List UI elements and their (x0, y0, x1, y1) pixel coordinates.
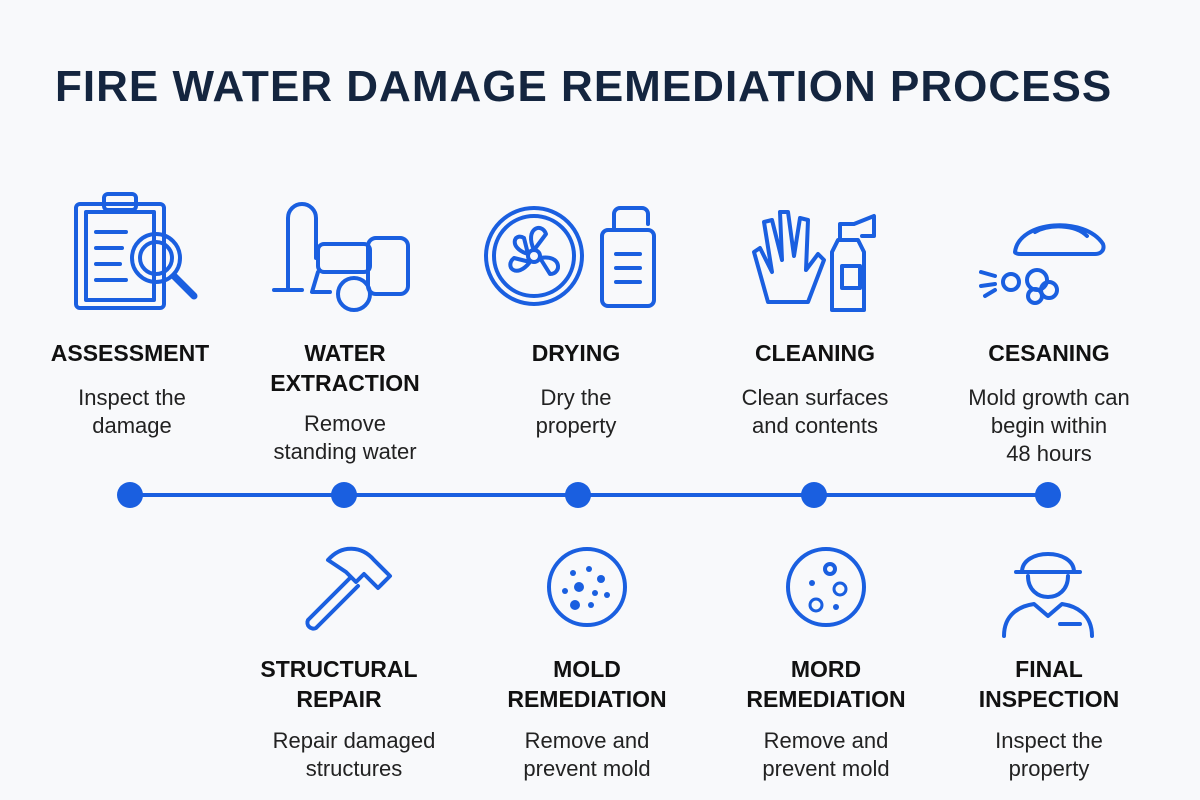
title: FIRE WATER DAMAGE REMEDIATION PROCESS (55, 62, 1112, 111)
text: drying: property (536, 413, 616, 438)
text: assessment: damage (92, 413, 172, 438)
text: assessment (78, 385, 186, 438)
heading: mord remediation: MORD (791, 656, 861, 682)
text: mold remediation (523, 728, 651, 781)
heading: drying: DRYING (532, 340, 620, 366)
text: water extraction: Remove (304, 411, 386, 436)
text: mord remediation: Remove and (764, 728, 888, 753)
text: water extraction: standing water (273, 439, 417, 464)
icon: hammer (305, 546, 392, 631)
text: cleaning (742, 385, 888, 438)
heading: final inspection: INSPECTION (979, 686, 1119, 712)
text: water extraction (273, 411, 417, 464)
icon: vacuum (272, 202, 410, 312)
text: cleaning: Clean surfaces (742, 385, 888, 410)
heading: water extraction: WATER (304, 340, 386, 366)
text: cesaning (968, 385, 1130, 466)
icon: inspector (1002, 552, 1094, 638)
icon: sponge with spray (978, 223, 1106, 305)
text: assessment: Inspect the (78, 385, 186, 410)
heading: structural repair: REPAIR (296, 686, 382, 712)
heading: assessment: ASSESSMENT (51, 340, 209, 366)
text: cesaning: begin within (991, 413, 1107, 438)
heading: mord remediation: REMEDIATION (746, 686, 906, 712)
text: drying: Dry the (541, 385, 611, 410)
text: mold remediation: prevent mold (523, 756, 651, 781)
text: cesaning: 48 hours (1006, 441, 1092, 466)
heading: water extraction: EXTRACTION (270, 370, 420, 396)
heading: structural repair (260, 656, 418, 712)
heading: mord remediation (746, 656, 906, 712)
heading: mold remediation: REMEDIATION (507, 686, 667, 712)
heading: final inspection (979, 656, 1119, 712)
heading: cleaning: CLEANING (755, 340, 875, 366)
heading: water extraction (270, 340, 420, 396)
icon: mold circle (547, 547, 627, 627)
text: cleaning: and contents (752, 413, 878, 438)
heading: final inspection: FINAL (1015, 656, 1083, 682)
text: mord remediation: prevent mold (762, 756, 890, 781)
icon: fan and dehumidifier (484, 206, 656, 308)
text: mold remediation: Remove and (525, 728, 649, 753)
text: structural repair: Repair damaged (273, 728, 435, 753)
text: structural repair (273, 728, 435, 781)
icon: mold circle rings (786, 547, 866, 627)
heading: mold remediation: MOLD (553, 656, 621, 682)
heading: cesaning: CESANING (988, 340, 1110, 366)
text: drying (536, 385, 616, 438)
text: cesaning: Mold growth can (968, 385, 1130, 410)
text: final inspection (995, 728, 1103, 781)
heading: mold remediation (507, 656, 667, 712)
text: mord remediation (762, 728, 890, 781)
text: final inspection: property (1009, 756, 1089, 781)
text: final inspection: Inspect the (995, 728, 1103, 753)
timeline (117, 482, 1061, 508)
heading: structural repair: STRUCTURAL (260, 656, 418, 682)
icon: gloves and spray (752, 210, 876, 312)
text: structural repair: structures (306, 756, 402, 781)
icon: clipboard with magnifier (74, 192, 198, 310)
